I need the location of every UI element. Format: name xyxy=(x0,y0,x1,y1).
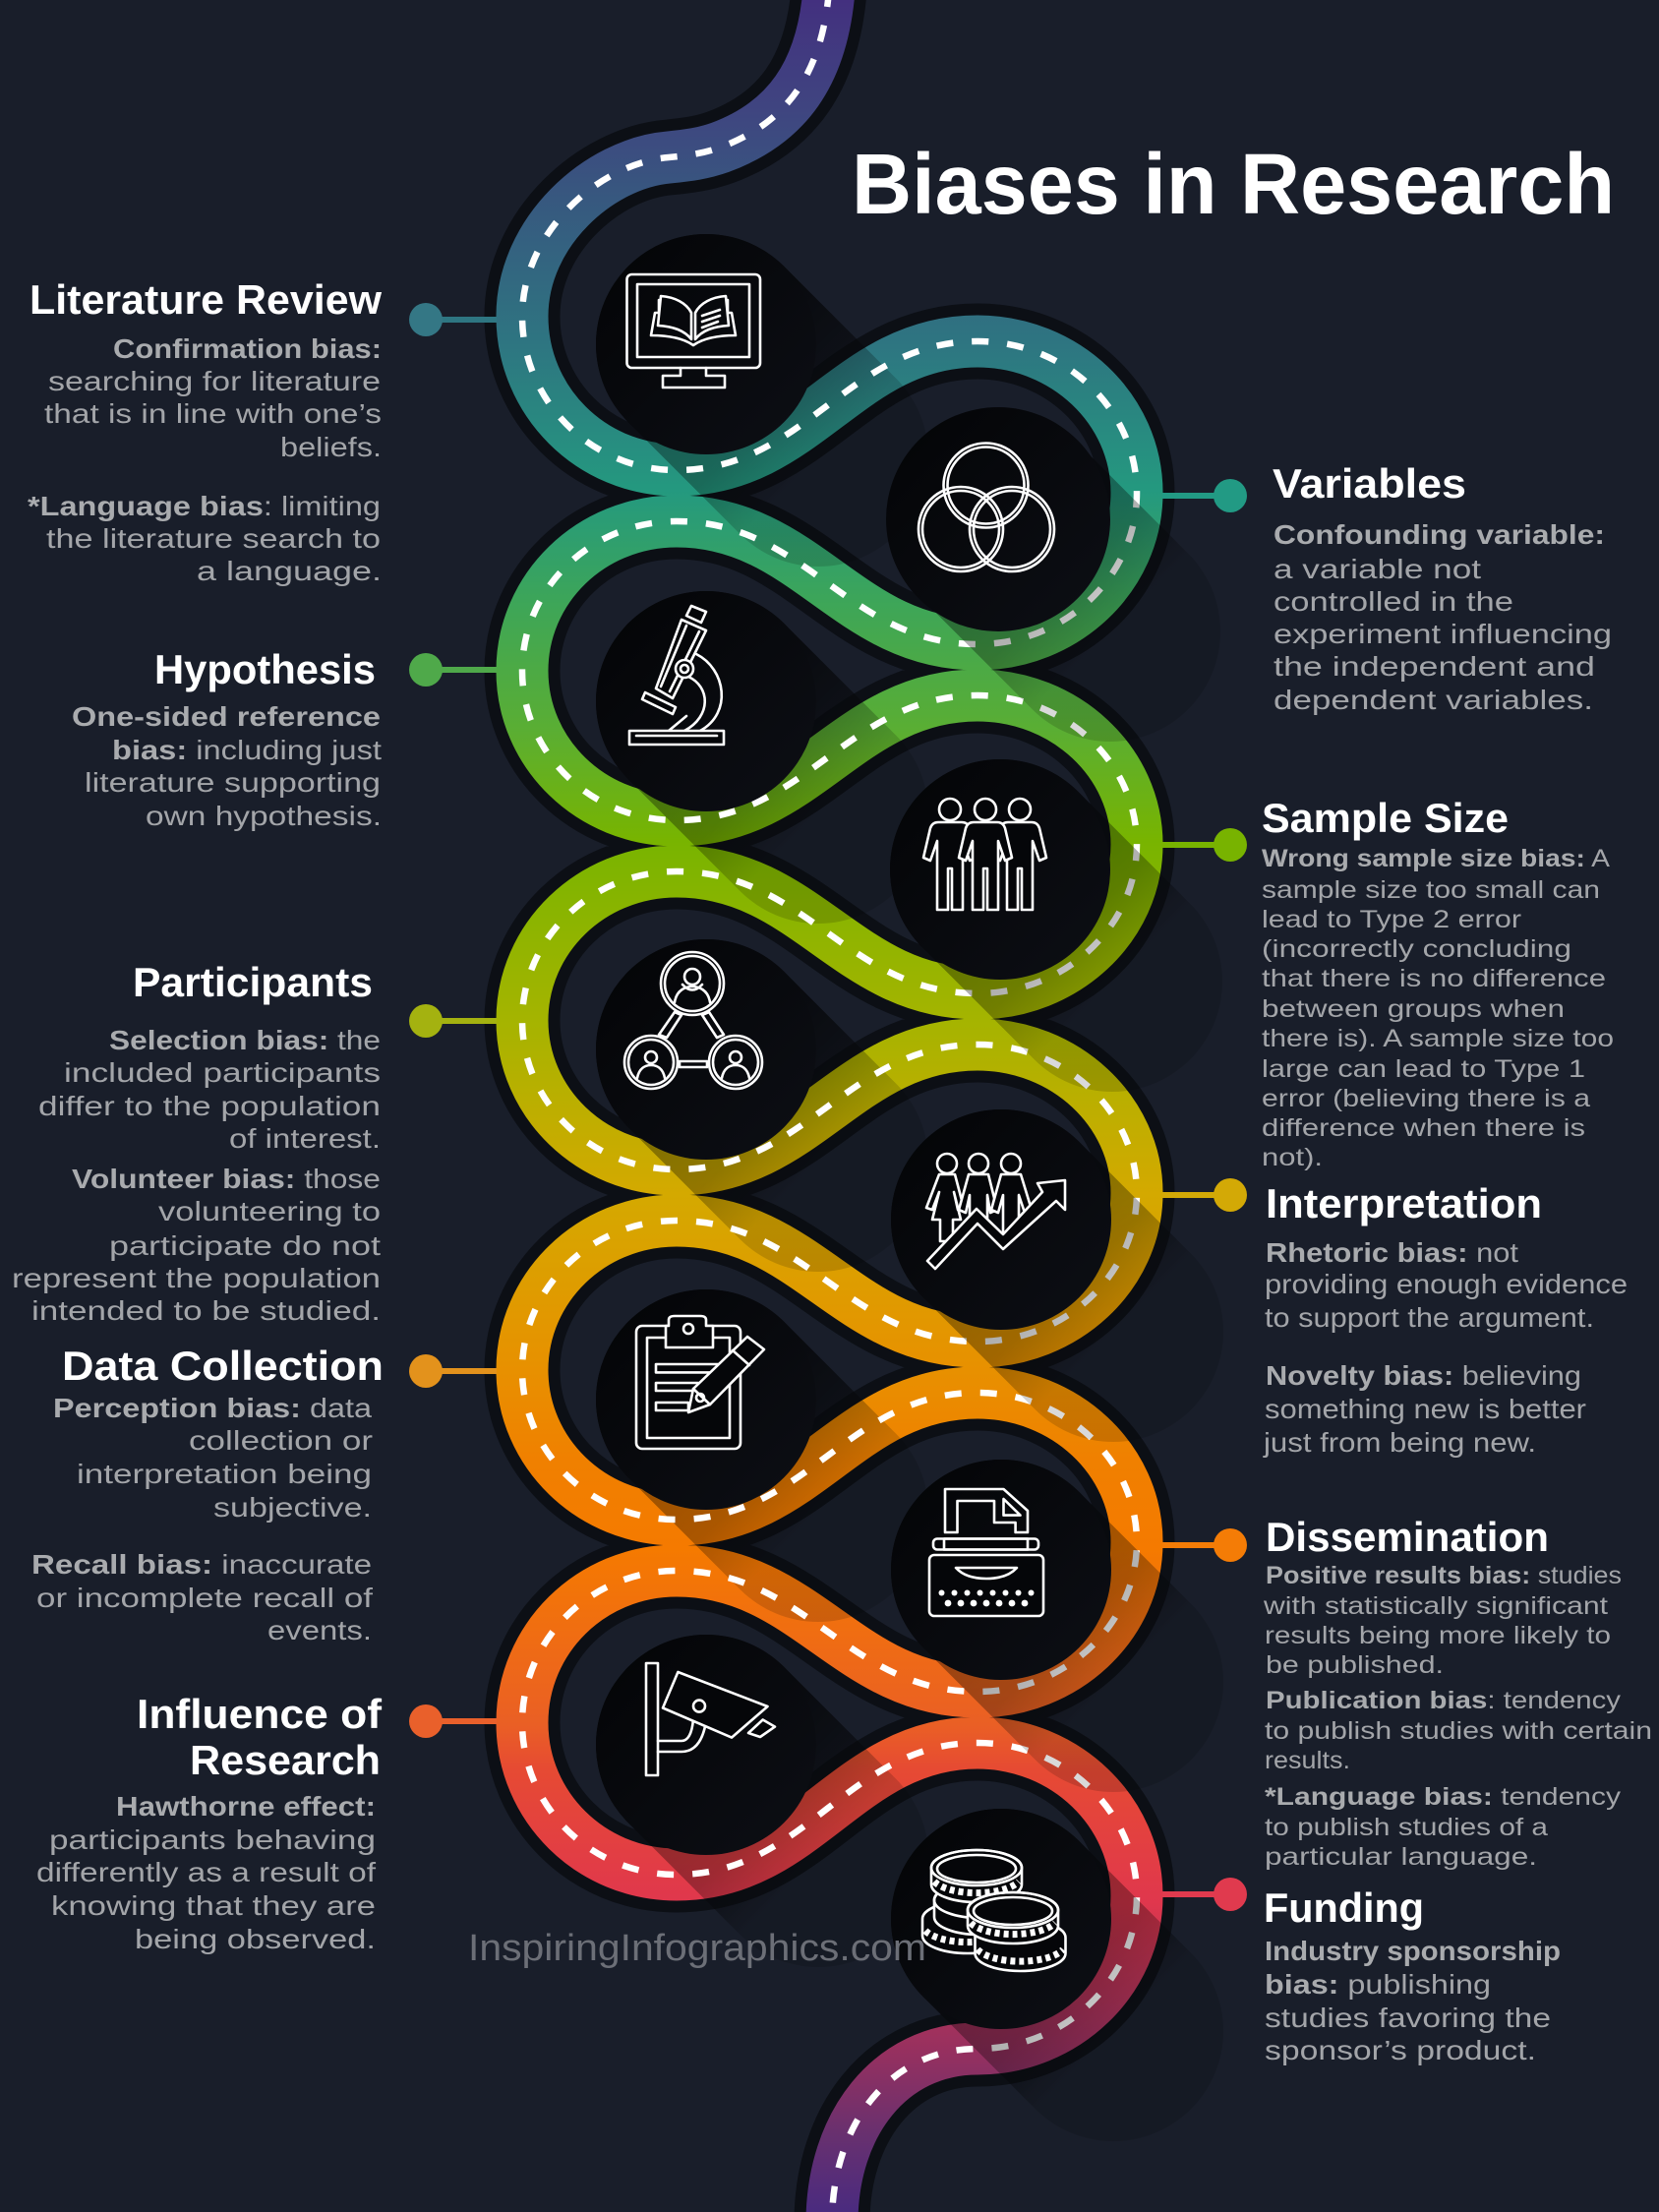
connector: sample size xyxy=(1162,828,1247,862)
text block: literature review biases: that is in line with one’s xyxy=(44,398,382,429)
text block: dissemination biases: to publish studies of a xyxy=(1265,1814,1548,1841)
heading: dissemination: Dissemination xyxy=(1266,1514,1549,1560)
connector: influence of research xyxy=(409,1704,497,1738)
title: Biases in Research xyxy=(852,137,1615,232)
text block: dissemination biases: particular language. xyxy=(1265,1843,1537,1871)
text block: dissemination biases: with statistically significant xyxy=(1263,1592,1608,1620)
text block: confounding variable: Confounding variable: xyxy=(1274,519,1605,550)
icon: typewriter xyxy=(929,1489,1043,1616)
text block: wrong sample size bias: error (believing there is a xyxy=(1262,1085,1590,1112)
icon: people with rising arrow xyxy=(926,1154,1065,1269)
text block: participant biases: included participants xyxy=(64,1057,381,1088)
text block: data collection biases: events. xyxy=(267,1615,372,1645)
connector: participants xyxy=(409,1004,497,1038)
panel: literature review xyxy=(28,276,382,586)
heading: data collection: Data Collection xyxy=(62,1343,384,1389)
connector: dissemination xyxy=(1162,1528,1247,1562)
heading: interpretation: Interpretation xyxy=(1266,1180,1542,1226)
heading: influence of research: Research xyxy=(190,1737,381,1783)
text block: dissemination biases xyxy=(1263,1562,1652,1871)
text block: interpretation biases: just from being new. xyxy=(1263,1427,1536,1458)
text block: participant biases: volunteering to xyxy=(158,1196,381,1226)
text block: literature review biases: *Language bias : limiting xyxy=(28,491,381,521)
icon: surveillance camera xyxy=(646,1663,775,1775)
text block: interpretation biases: something new is better xyxy=(1265,1394,1586,1424)
text block: confounding variable: controlled in the xyxy=(1274,586,1513,617)
text block: confounding variable: the independent and xyxy=(1274,651,1595,682)
text block: wrong sample size bias: lead to Type 2 error xyxy=(1262,906,1521,933)
text block: literature review biases: searching for literature xyxy=(48,366,381,396)
road centre dashes xyxy=(522,0,1137,2212)
text block: literature review biases: Confirmation bias: xyxy=(113,333,382,364)
text block: participant biases: Volunteer bias: those xyxy=(72,1164,381,1194)
text block: industry sponsorship bias: bias: publishing xyxy=(1265,1969,1491,2000)
text block: dissemination biases: *Language bias: tendency xyxy=(1265,1783,1622,1811)
text block: confounding variable: dependent variables. xyxy=(1274,685,1593,715)
text block: wrong sample size bias: difference when there is xyxy=(1262,1114,1585,1142)
text block: participant biases xyxy=(12,1025,381,1326)
watermark: InspiringInfographics.com xyxy=(468,1928,926,1969)
text block: hawthorne effect: knowing that they are xyxy=(51,1890,376,1921)
heading: variables: Variables xyxy=(1273,460,1466,507)
text block: wrong sample size bias: not). xyxy=(1262,1144,1323,1171)
text block: data collection biases: subjective. xyxy=(213,1492,372,1523)
text block: wrong sample size bias: large can lead to Type 1 xyxy=(1262,1055,1585,1083)
text block: wrong sample size bias xyxy=(1262,845,1614,1171)
panel: hypothesis xyxy=(72,646,382,831)
panel: dissemination xyxy=(1263,1514,1652,1871)
text block: dissemination biases: to publish studies with certain xyxy=(1265,1717,1652,1745)
text block: industry sponsorship bias: studies favoring the xyxy=(1265,2003,1551,2033)
heading: literature review: Literature Review xyxy=(30,276,382,323)
text block: data collection biases: collection or xyxy=(189,1425,373,1456)
connector: data collection xyxy=(409,1354,497,1388)
text block: data collection biases: interpretation being xyxy=(77,1459,372,1489)
heading: sample size: Sample Size xyxy=(1262,795,1509,841)
connector: hypothesis xyxy=(409,653,497,687)
connector: funding xyxy=(1162,1878,1247,1911)
text block: dissemination biases: results being more likely to xyxy=(1265,1622,1611,1649)
text block: participant biases: of interest. xyxy=(229,1123,381,1154)
text block: literature review biases: beliefs. xyxy=(280,432,382,462)
text block: literature review biases: a language. xyxy=(197,556,382,586)
icon: overlapping circles xyxy=(918,443,1054,571)
connector: interpretation xyxy=(1162,1178,1247,1212)
text block: industry sponsorship bias xyxy=(1265,1936,1561,2065)
panel: influence of research xyxy=(36,1691,383,1954)
icon: group of three people xyxy=(923,799,1046,910)
text block: interpretation biases: to support the argument. xyxy=(1265,1302,1594,1333)
heading: hypothesis: Hypothesis xyxy=(154,646,376,692)
text block: hawthorne effect: Hawthorne effect: xyxy=(116,1791,376,1822)
text block: hypothesis biases: One-sided reference xyxy=(72,701,381,732)
long shadows on road from left discs xyxy=(706,344,818,1857)
text block: hypothesis biases xyxy=(72,701,382,831)
text block: participant biases: intended to be studied. xyxy=(31,1295,381,1326)
text block: hawthorne effect xyxy=(36,1791,376,1954)
text block: literature review biases xyxy=(28,333,382,586)
text block: hypothesis biases: bias: including just xyxy=(112,735,382,765)
panel: participants xyxy=(12,959,381,1326)
heading: influence of research: Influence of xyxy=(137,1691,383,1737)
icon discs xyxy=(596,234,1111,2029)
panel: sample size xyxy=(1262,795,1614,1171)
text block: data collection biases xyxy=(31,1393,373,1645)
text block: data collection biases: Recall bias: inaccurate xyxy=(31,1549,372,1580)
text block: data collection biases: Perception bias: data xyxy=(53,1393,372,1423)
text block: hawthorne effect: being observed. xyxy=(135,1924,376,1954)
text block: participant biases: Selection bias: the xyxy=(109,1025,381,1055)
text block: wrong sample size bias: (incorrectly concluding xyxy=(1262,935,1571,963)
text block: participant biases: participate do not xyxy=(109,1230,381,1261)
text block: dissemination biases: Publication bias : tendency xyxy=(1266,1687,1622,1714)
text block: hawthorne effect: participants behaving xyxy=(49,1824,376,1855)
icon: clipboard and pencil xyxy=(636,1316,764,1449)
icon: microscope xyxy=(629,606,724,745)
text block: confounding variable xyxy=(1274,519,1612,715)
panel: variables xyxy=(1273,460,1612,715)
text block: hawthorne effect: differently as a result of xyxy=(36,1857,376,1887)
text block: wrong sample size bias: that there is no difference xyxy=(1262,965,1606,992)
text block: industry sponsorship bias: Industry sponsorship xyxy=(1265,1936,1561,1966)
long shadows on road from right discs xyxy=(998,519,1113,2031)
text block: hypothesis biases: literature supporting xyxy=(85,767,381,798)
text block: wrong sample size bias: between groups when xyxy=(1262,995,1565,1023)
text block: literature review biases: the literature search to xyxy=(46,523,381,554)
text block: wrong sample size bias: there is). A sample size too xyxy=(1262,1025,1614,1052)
text block: wrong sample size bias: sample size too small can xyxy=(1262,876,1600,904)
panel: funding xyxy=(1264,1884,1561,2065)
text block: participant biases: differ to the population xyxy=(38,1091,381,1121)
connector: literature review xyxy=(409,303,497,336)
text block: interpretation biases: providing enough evidence xyxy=(1265,1269,1628,1299)
heading: participants: Participants xyxy=(133,959,373,1005)
text block: interpretation biases: Rhetoric bias: not xyxy=(1266,1237,1518,1268)
text block: confounding variable: a variable not xyxy=(1274,554,1481,584)
shadow base under the road xyxy=(706,344,1113,2031)
text block: industry sponsorship bias: sponsor’s product. xyxy=(1265,2035,1536,2065)
text block: participant biases: represent the population xyxy=(12,1263,381,1293)
text block: dissemination biases: results. xyxy=(1265,1747,1350,1774)
text block: dissemination biases: Positive results bias: studies xyxy=(1266,1562,1622,1589)
text block: dissemination biases: be published. xyxy=(1266,1651,1444,1679)
text block: wrong sample size bias: Wrong sample size bias: A xyxy=(1262,845,1610,872)
connector: variables xyxy=(1162,479,1247,512)
text block: data collection biases: or incomplete recall of xyxy=(36,1583,373,1613)
text block: hypothesis biases: own hypothesis. xyxy=(146,801,382,831)
icon: monitor with open book xyxy=(627,274,760,388)
heading: funding: Funding xyxy=(1264,1884,1424,1931)
heading: influence of research xyxy=(137,1691,383,1783)
text block: interpretation biases xyxy=(1263,1237,1628,1458)
text block: interpretation biases: Novelty bias: believing xyxy=(1266,1360,1581,1391)
text block: confounding variable: experiment influencing xyxy=(1274,619,1612,649)
panel: data collection xyxy=(31,1343,384,1645)
panel: interpretation xyxy=(1263,1180,1628,1458)
winding road xyxy=(522,0,1137,2212)
icon: stacks of coins xyxy=(922,1850,1066,1971)
icon: network of people xyxy=(624,952,762,1089)
